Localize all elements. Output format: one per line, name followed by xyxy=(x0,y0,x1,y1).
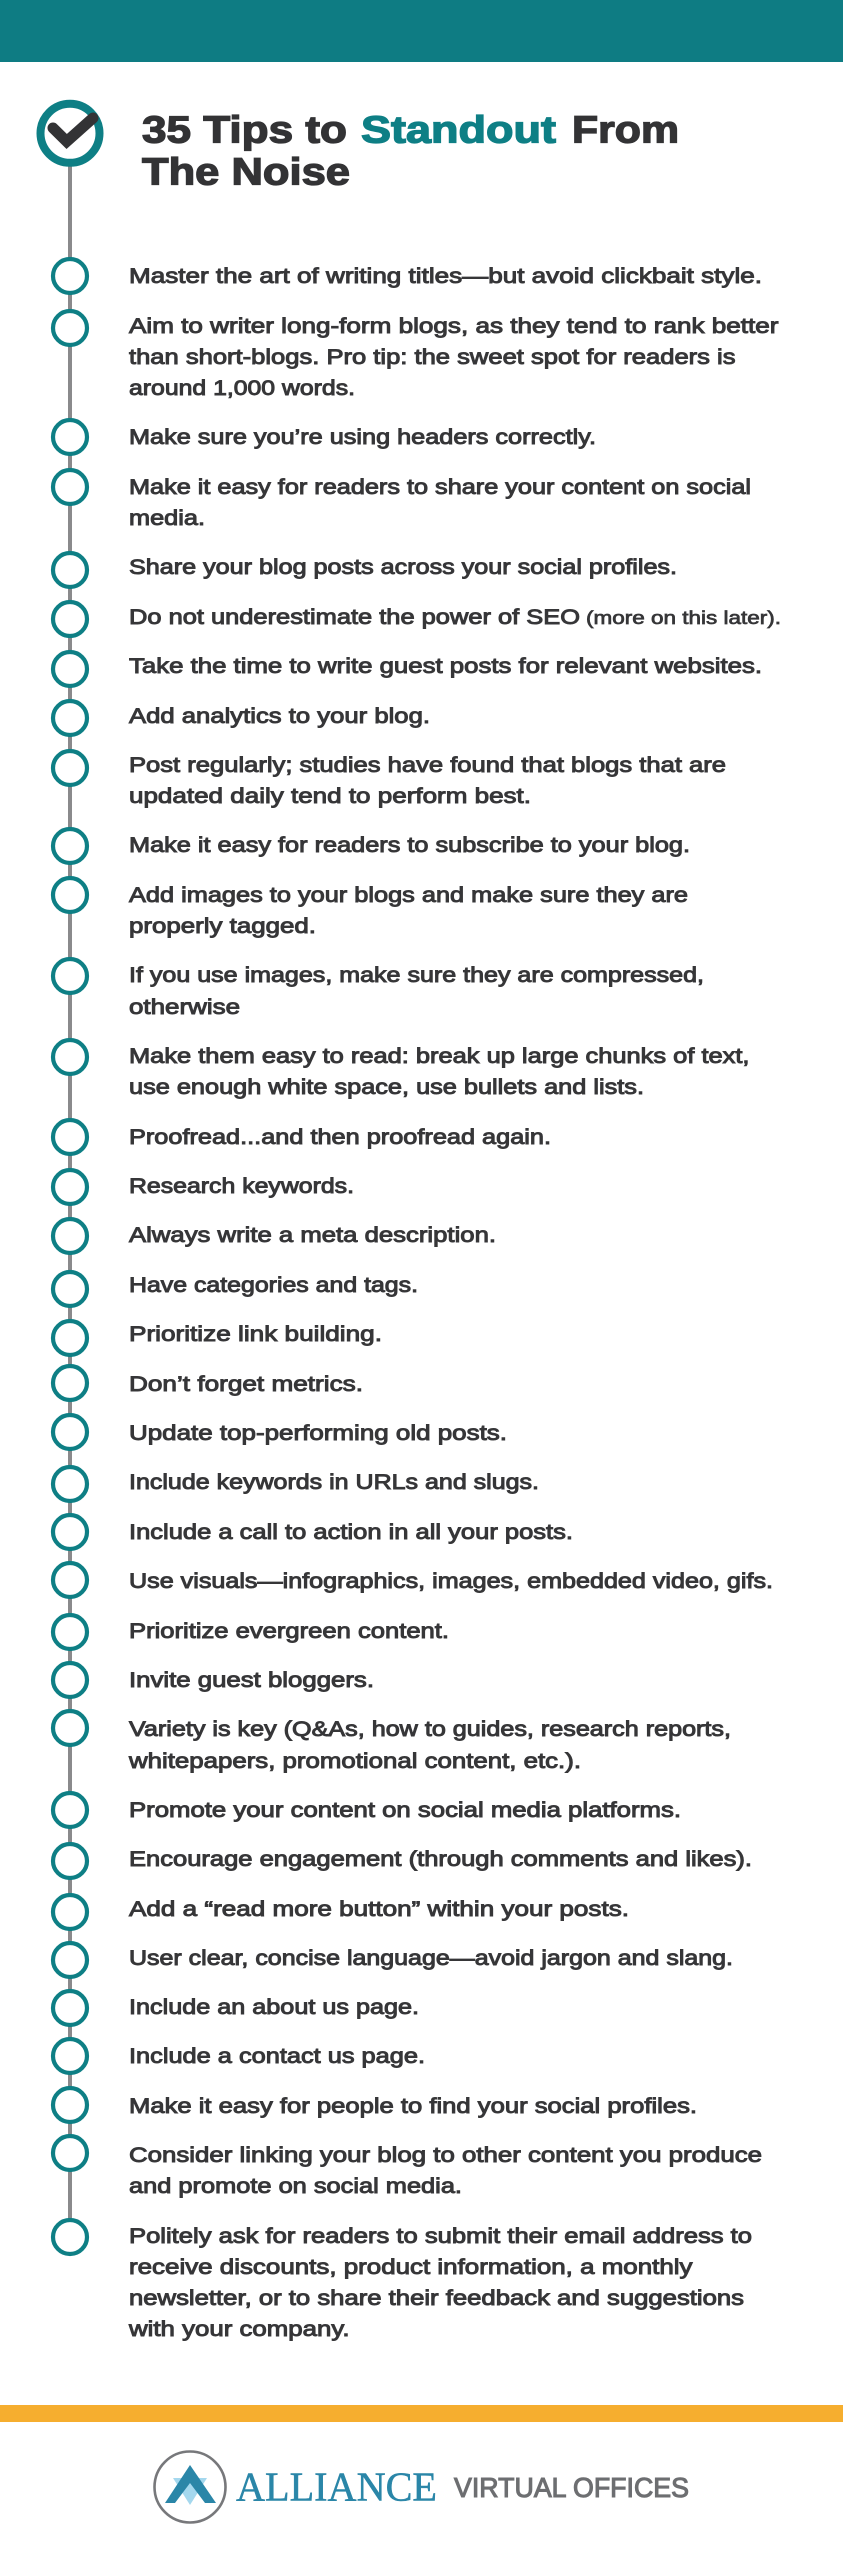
tip 6: (more on this later). xyxy=(586,608,781,628)
tip 31: Include an about us page. xyxy=(129,1995,419,2019)
tip 11: Add images to your blogs and make sure they are xyxy=(129,883,688,907)
tip 15: Research keywords. xyxy=(129,1174,354,1198)
tip 32 xyxy=(53,2039,425,2073)
tip 28: Encourage engagement (through comments and likes). xyxy=(129,1847,752,1871)
tip 3 xyxy=(53,420,596,454)
icon: check mark badge xyxy=(40,104,100,163)
tip 6: Do not underestimate the power of SEO xyxy=(129,605,580,629)
tip 25 xyxy=(53,1663,374,1697)
tip 20 xyxy=(53,1415,507,1449)
tip 35 xyxy=(53,2220,752,2341)
tip 5 xyxy=(53,553,677,587)
tip 33: Make it easy for people to find your social profiles. xyxy=(129,2094,697,2118)
logo wordmark: Alliance: ALLIANCE xyxy=(236,2464,437,2510)
tip 18 xyxy=(53,1321,382,1355)
tip 9 xyxy=(53,751,726,808)
tip 27 xyxy=(53,1793,681,1827)
title: Standout xyxy=(361,110,556,152)
title: From xyxy=(572,110,679,152)
tip 35: receive discounts, product information, a monthly xyxy=(129,2255,693,2279)
tip 9: updated daily tend to perform best. xyxy=(129,784,531,808)
tip 19 xyxy=(53,1366,363,1400)
tip 25: Invite guest bloggers. xyxy=(129,1668,374,1692)
tip 10 xyxy=(53,829,690,863)
tip 7: Take the time to write guest posts for relevant websites. xyxy=(129,654,762,678)
title: 35 Tips to xyxy=(142,110,347,152)
timeline connector line xyxy=(68,133,72,2237)
tip 35: with your company. xyxy=(128,2317,349,2341)
tip 12 xyxy=(53,959,704,1019)
title: The Noise xyxy=(142,152,350,194)
tip 13: use enough white space, use bullets and lists. xyxy=(129,1075,644,1099)
tip 6 xyxy=(53,602,781,636)
tip 31 xyxy=(53,1991,419,2025)
tip 10: Make it easy for readers to subscribe to your blog. xyxy=(129,833,690,857)
tip 34: and promote on social media. xyxy=(129,2174,462,2198)
tip 19: Don’t forget metrics. xyxy=(129,1372,363,1396)
top teal band xyxy=(0,0,843,62)
tip 27: Promote your content on social media platforms. xyxy=(129,1798,681,1822)
tip 24: Prioritize evergreen content. xyxy=(129,1619,449,1643)
tip 8: Add analytics to your blog. xyxy=(129,704,430,728)
title xyxy=(142,110,679,194)
tip 3: Make sure you’re using headers correctly. xyxy=(129,425,596,449)
tip 30: User clear, concise language—avoid jargon and slang. xyxy=(129,1946,733,1970)
tip 26: whitepapers, promotional content, etc.). xyxy=(128,1749,581,1773)
tip 1 xyxy=(53,259,762,293)
tip 23: Use visuals—infographics, images, embedded video, gifs. xyxy=(129,1569,773,1593)
tip 2: than short-blogs. Pro tip: the sweet spot for readers is xyxy=(129,345,736,369)
panel: tips list xyxy=(53,259,781,2341)
tip 33 xyxy=(53,2088,697,2122)
tip 9: Post regularly; studies have found that blogs that are xyxy=(129,753,726,777)
tip 34: Consider linking your blog to other content you produce xyxy=(129,2143,762,2167)
tip 20: Update top-performing old posts. xyxy=(129,1421,507,1445)
tip 34 xyxy=(53,2136,762,2198)
tip 12: If you use images, make sure they are compressed, xyxy=(129,963,704,987)
tip 35: Politely ask for readers to submit their email address to xyxy=(129,2224,752,2248)
tip 1: Master the art of writing titles—but avoid clickbait style. xyxy=(129,264,762,288)
tip 23 xyxy=(53,1563,773,1597)
icon: logo emblem xyxy=(154,2452,226,2522)
tip 15 xyxy=(53,1170,354,1204)
tip 17: Have categories and tags. xyxy=(129,1273,418,1297)
tip 18: Prioritize link building. xyxy=(129,1322,382,1346)
tip 29 xyxy=(53,1895,629,1929)
tip 26 xyxy=(53,1711,731,1773)
tip 21 xyxy=(53,1467,539,1501)
tip 14: Proofread...and then proofread again. xyxy=(129,1125,551,1149)
tip 30 xyxy=(53,1943,733,1977)
tip 16: Always write a meta description. xyxy=(129,1223,496,1247)
tip 11: properly tagged. xyxy=(129,914,316,938)
tip 24 xyxy=(53,1615,449,1649)
tip 12: otherwise xyxy=(129,995,240,1019)
tip 22 xyxy=(53,1515,573,1549)
tip 22: Include a call to action in all your posts. xyxy=(129,1520,573,1544)
tip 13: Make them easy to read: break up large chunks of text, xyxy=(129,1044,750,1068)
tip 5: Share your blog posts across your social profiles. xyxy=(129,555,677,579)
tip 2: Aim to writer long-form blogs, as they tend to rank better xyxy=(129,314,778,338)
tip 35: newsletter, or to share their feedback and suggestions xyxy=(129,2286,744,2310)
tip 4 xyxy=(53,470,751,530)
tip 2: around 1,000 words. xyxy=(129,376,355,400)
tip 28 xyxy=(53,1844,752,1878)
tip 14 xyxy=(53,1120,551,1154)
tip 13 xyxy=(53,1040,750,1099)
tip 17 xyxy=(53,1272,418,1306)
tip 32: Include a contact us page. xyxy=(129,2044,425,2068)
tip 7 xyxy=(53,652,762,686)
logo wordmark: Virtual Offices: VIRTUAL OFFICES xyxy=(454,2472,689,2503)
tip 29: Add a “read more button” within your posts. xyxy=(129,1897,629,1921)
tip 16 xyxy=(53,1219,496,1253)
orange footer bar xyxy=(0,2405,843,2422)
tip 21: Include keywords in URLs and slugs. xyxy=(129,1470,539,1494)
tip 8 xyxy=(53,701,430,735)
footer logo xyxy=(154,2452,689,2522)
tip 4: Make it easy for readers to share your content on social xyxy=(129,475,751,499)
tip 4: media. xyxy=(129,506,205,530)
tip 11 xyxy=(53,878,688,938)
tip 26: Variety is key (Q&As, how to guides, research reports, xyxy=(129,1717,731,1741)
tip 2 xyxy=(53,311,778,400)
